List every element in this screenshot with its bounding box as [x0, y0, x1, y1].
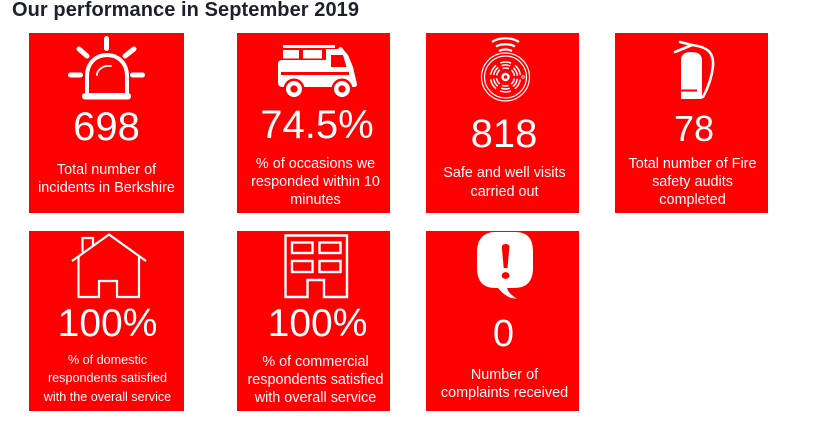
panel: safe and well visits: [426, 33, 579, 213]
value: 74.5%: 74.5%: [260, 103, 374, 147]
label: incidents: Total number of: [57, 162, 157, 178]
panel: domestic satisfaction: [29, 231, 184, 411]
value: 0: 0: [493, 313, 514, 355]
icon: smoke alarm: [482, 38, 530, 101]
panel: response time: [237, 33, 390, 213]
label: response time: % of occasions we: [256, 156, 375, 172]
panel: incidents: [29, 33, 184, 213]
value: 78: 78: [674, 108, 714, 149]
label: complaints: Number of: [471, 367, 539, 383]
value: 698: 698: [73, 105, 140, 149]
panel: fire safety audits: [615, 33, 768, 213]
icon: house: [72, 234, 146, 297]
label: domestic: respondents satisfied: [48, 371, 167, 385]
icon: commercial building: [286, 236, 347, 297]
value: 100%: 100%: [58, 302, 157, 345]
label: incidents: incidents in Berkshire: [38, 180, 175, 196]
icon: siren: [70, 38, 142, 100]
label: commercial: with overall service: [254, 390, 376, 406]
label: commercial: respondents satisfied: [248, 372, 384, 388]
label: audits: safety audits: [652, 174, 733, 190]
label: audits: completed: [659, 192, 726, 208]
label: domestic: % of domestic: [68, 353, 147, 367]
icon: fire extinguisher: [675, 42, 713, 99]
label: response time: minutes: [290, 192, 341, 208]
icon: fire engine: [278, 45, 357, 100]
label: commercial: % of commercial: [262, 354, 369, 370]
panel: complaints: [426, 231, 579, 411]
icon: speech bubble with exclamation mark: [477, 232, 533, 299]
label: visits: carried out: [470, 184, 538, 200]
label: complaints: complaints received: [441, 385, 568, 401]
label: audits: Total number of Fire: [629, 156, 756, 172]
label: response time: responded within 10: [251, 174, 380, 190]
value: 100%: 100%: [268, 302, 367, 345]
panel: commercial satisfaction: [237, 231, 390, 411]
label: domestic: with the overall service: [43, 390, 171, 404]
label: visits: Safe and well visits: [443, 165, 566, 181]
value: 818: 818: [471, 112, 537, 156]
